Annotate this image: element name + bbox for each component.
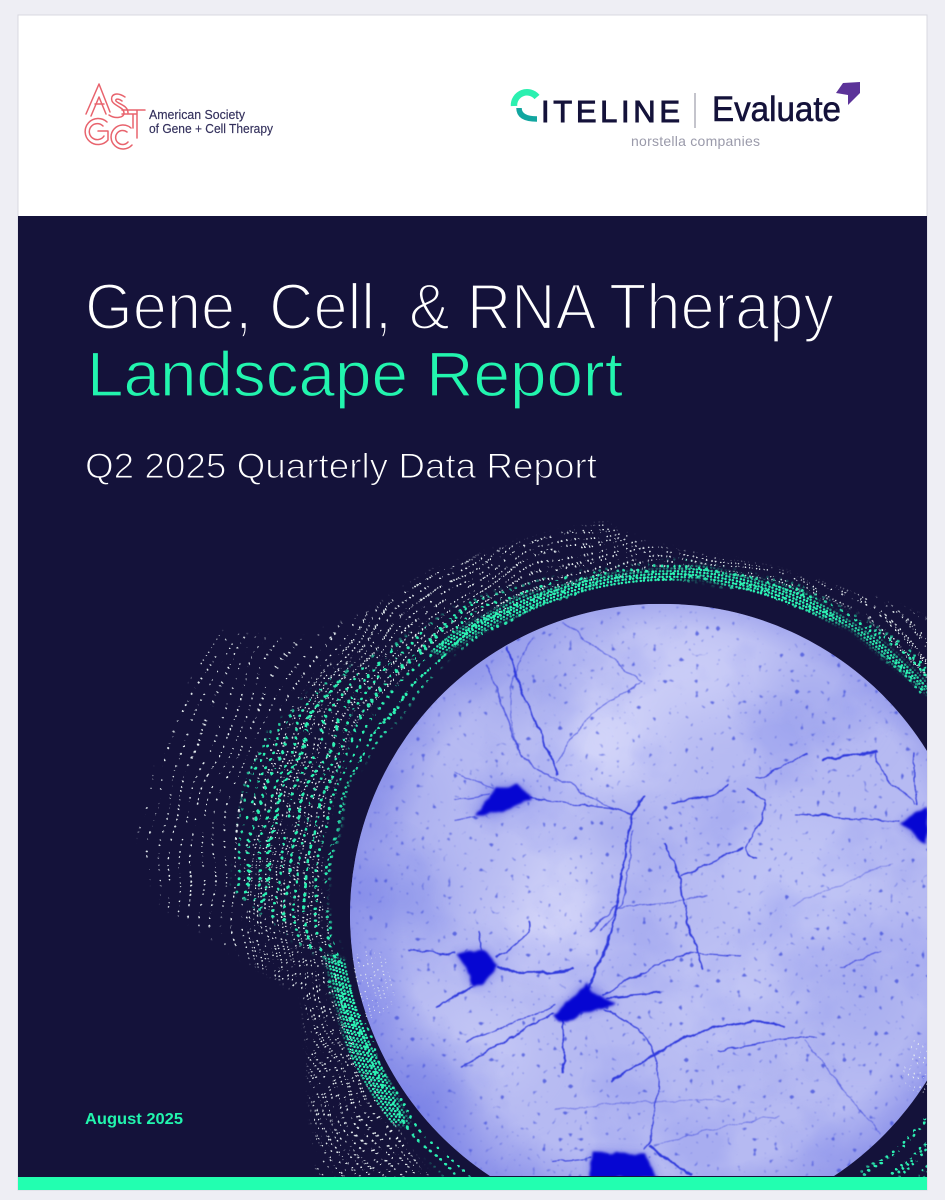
edge shading	[350, 604, 927, 1178]
subtitle: Q2 2025 Quarterly Data Report	[85, 447, 597, 486]
circle base	[350, 604, 927, 1178]
icon: Evaluate purple arrow	[836, 82, 860, 105]
dark cover panel	[18, 216, 927, 1177]
text: society name	[149, 108, 274, 136]
neuron bodies	[456, 784, 927, 1178]
neuron processes	[409, 623, 917, 1176]
text: society name: of Gene + Cell Therapy	[149, 122, 274, 136]
mottled texture	[366, 646, 927, 1176]
white particle cloud	[136, 521, 927, 1177]
neuron microscopy circle	[348, 588, 945, 1178]
text: Evaluate: Evaluate	[712, 90, 841, 129]
divider	[694, 93, 696, 128]
Citeline and Evaluate logo	[514, 82, 860, 149]
text: norstella companies: norstella companies	[631, 133, 760, 149]
date: August 2025	[85, 1111, 183, 1128]
text: society name: American Society	[149, 108, 246, 122]
tonal clouds	[355, 625, 910, 1150]
title line 2: Landscape Report	[87, 340, 624, 410]
teal dotted field	[229, 557, 927, 1177]
neuron halo	[456, 784, 927, 1178]
bright teal band	[322, 562, 927, 1128]
icon: ASGCT monogram	[85, 84, 145, 149]
particle ring around the cell	[136, 521, 927, 1177]
text: Citeline: ITELINE	[541, 94, 680, 129]
teal footer bar	[18, 1177, 927, 1190]
fine blue specks	[350, 604, 927, 1178]
icon: Citeline C	[514, 92, 537, 119]
particles over the circle	[352, 949, 927, 1096]
title line 1: Gene, Cell, & RNA Therapy	[85, 270, 834, 343]
ASGCT logo	[85, 84, 274, 149]
title	[85, 270, 834, 410]
